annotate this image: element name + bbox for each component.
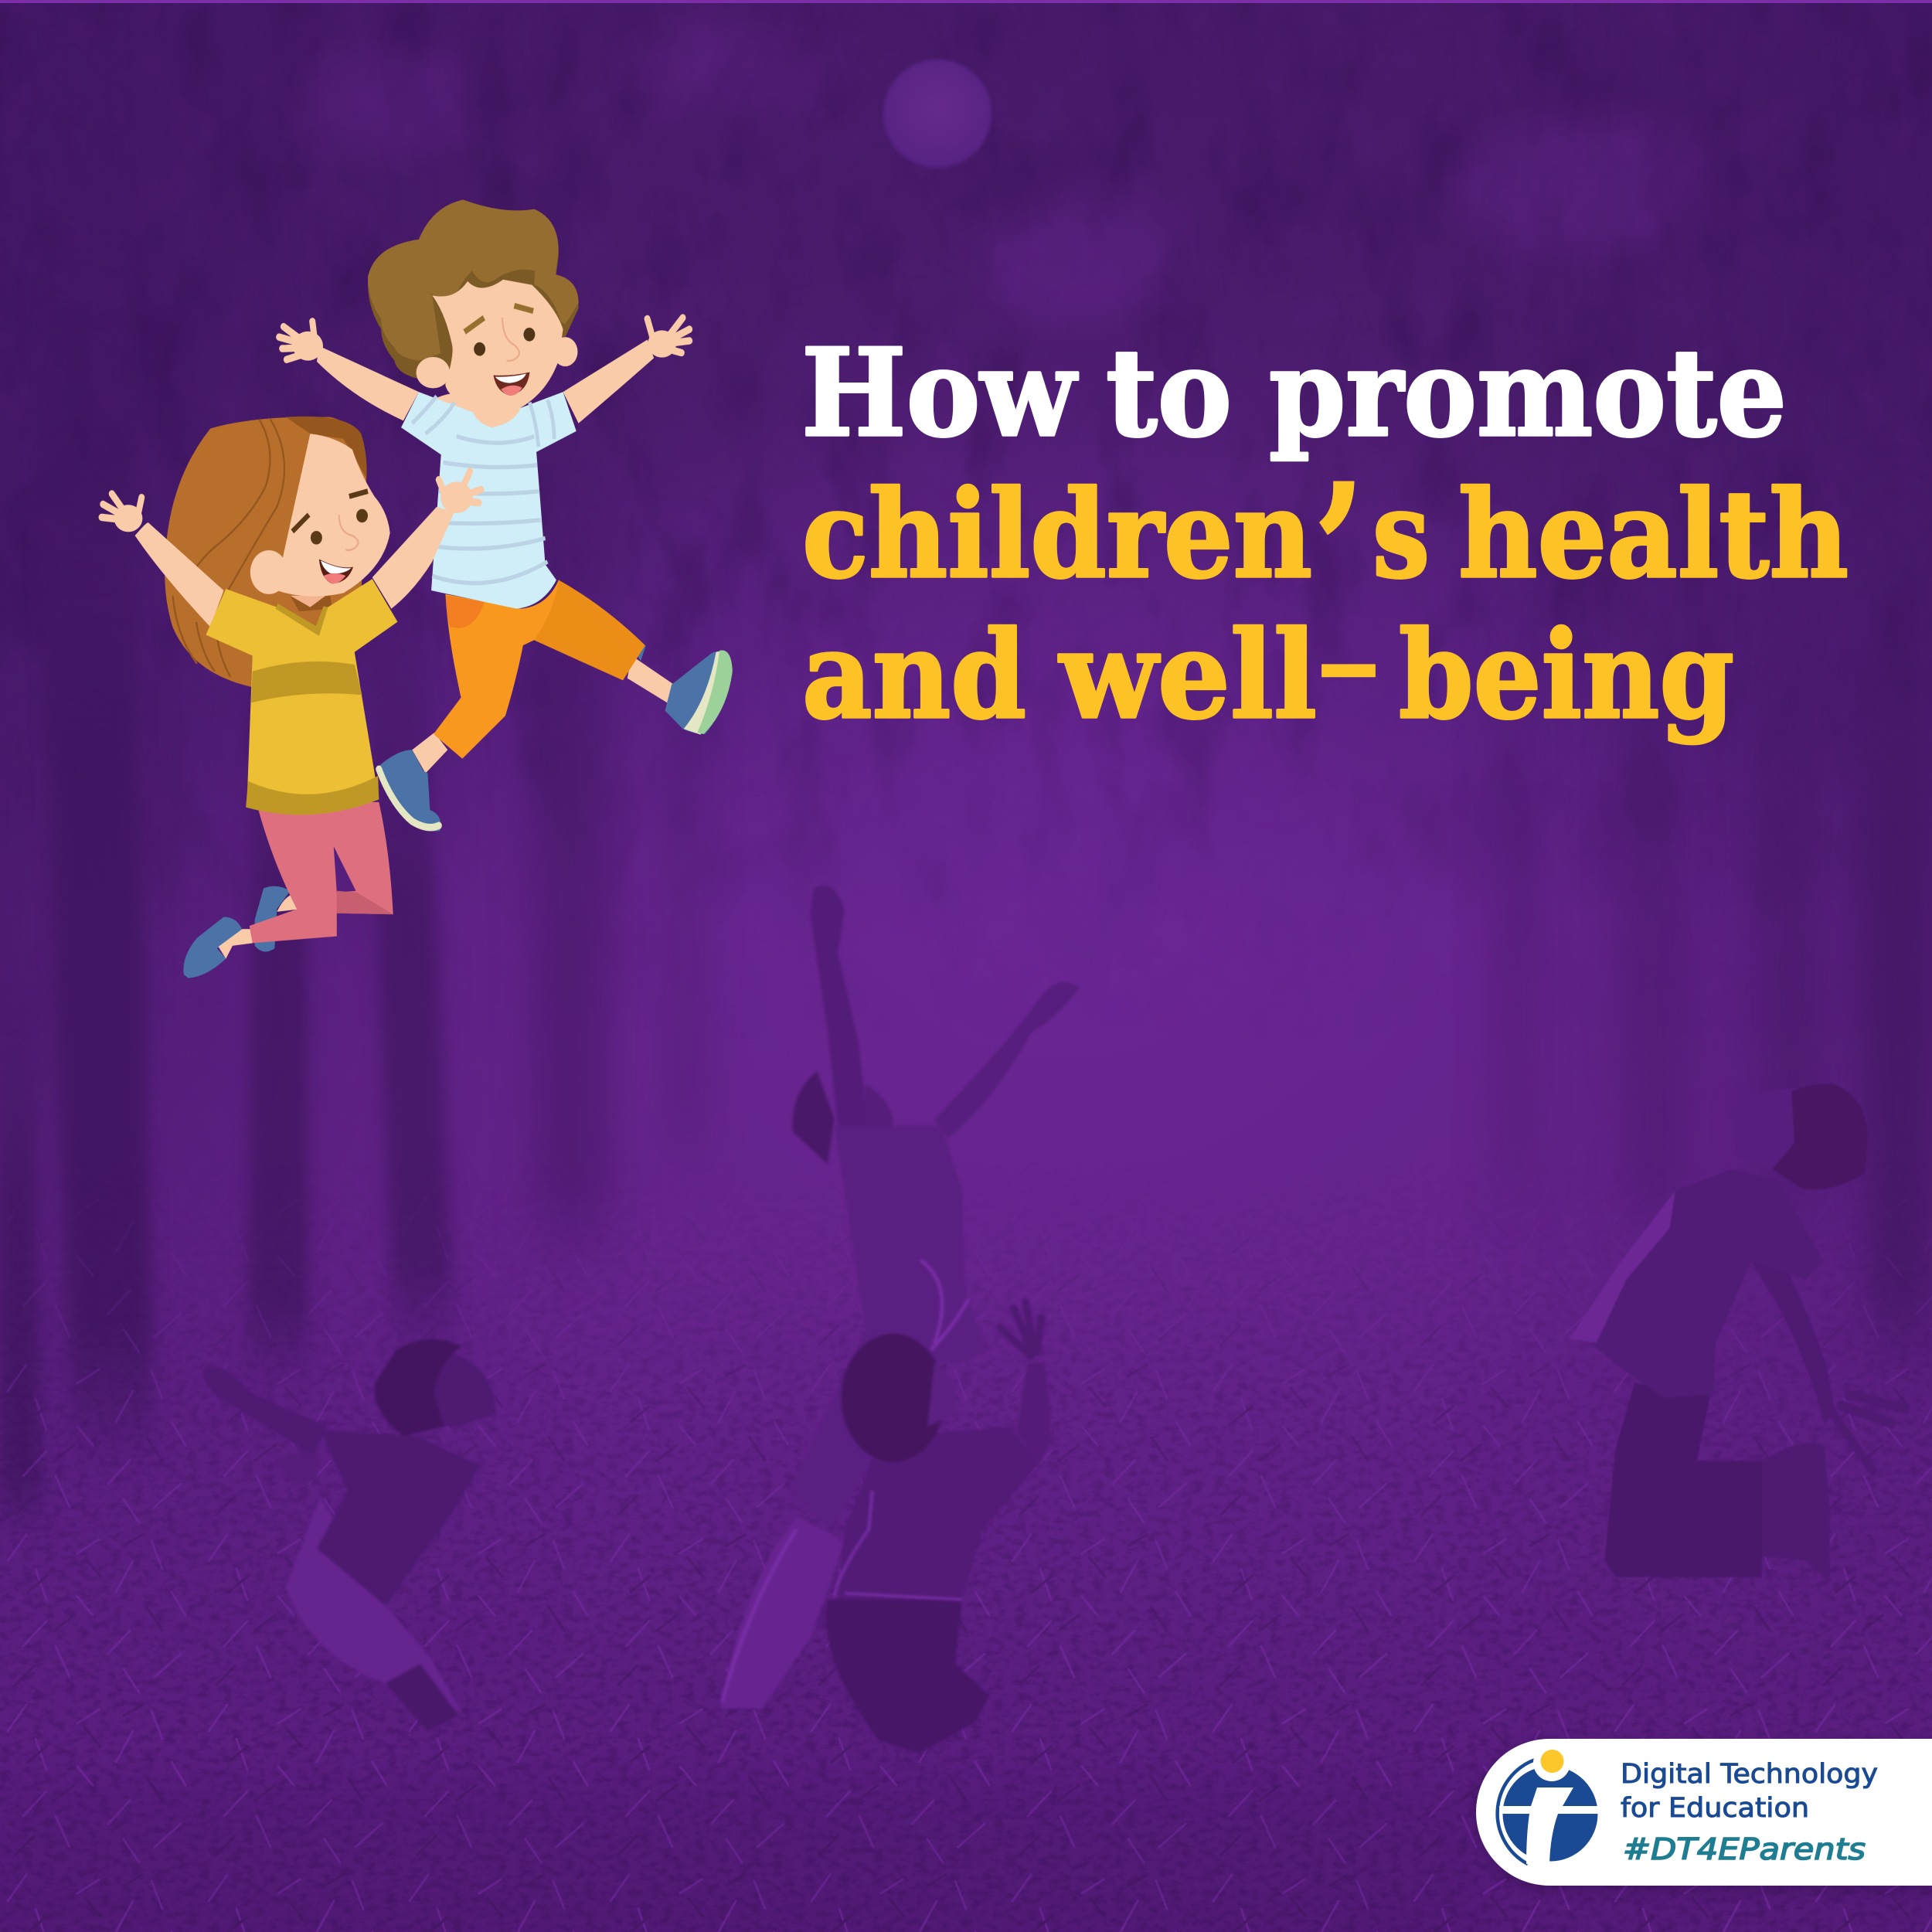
- title line 3: and: [802, 604, 1026, 746]
- girl face: [250, 434, 390, 611]
- photo: child on the left: [203, 1339, 496, 1731]
- illustration: two jumping cartoon children: [102, 199, 733, 978]
- cartoon girl: [102, 417, 481, 978]
- logo line 1: Digital Technology: [1621, 1759, 1878, 1790]
- title line 1: How: [801, 322, 1078, 464]
- photo: kneeling child on the right: [1570, 1084, 1906, 1583]
- hashtag: #DT4EParents: [1623, 1832, 1866, 1866]
- boy shorts: [434, 580, 646, 759]
- boy legs: [412, 656, 674, 774]
- title line 3: [802, 604, 1734, 746]
- logo line 2: for Education: [1621, 1793, 1809, 1824]
- title line 2: children: [802, 464, 1312, 605]
- title line 3: -: [1313, 609, 1384, 718]
- girl legs and shoes: [183, 886, 299, 978]
- title line 2: s: [1372, 464, 1430, 605]
- cartoon boy: [279, 199, 733, 831]
- title line 2: health: [1458, 464, 1849, 605]
- title line 1: [801, 322, 1787, 464]
- girl arms: [102, 471, 481, 627]
- title line 1: promote: [1269, 322, 1787, 464]
- photo: front child in the middle: [826, 1301, 1052, 1753]
- title line 1: to: [1106, 322, 1232, 464]
- title: [801, 322, 1849, 746]
- boy face: [417, 280, 577, 427]
- title line 2: [802, 443, 1849, 661]
- boy t-shirt: [401, 392, 577, 609]
- top edge stripe: [0, 0, 1932, 3]
- girl t-shirt: [206, 579, 397, 815]
- logo text: [1621, 1759, 1878, 1866]
- title line 3: being: [1399, 604, 1734, 746]
- boy shoes: [376, 650, 733, 831]
- logo icon: [1498, 1744, 1601, 1864]
- title line 3: well: [1058, 604, 1317, 746]
- photo: jumping child in the middle: [720, 885, 1080, 1709]
- photo: ball in the air: [883, 60, 992, 168]
- girl trousers: [250, 802, 393, 943]
- logo badge: [1476, 1739, 1932, 1890]
- girl hair: [165, 417, 367, 687]
- badge background: [1476, 1739, 1932, 1886]
- boy arms: [279, 318, 689, 434]
- boy hair: [368, 199, 579, 386]
- title line 2: ’: [1312, 443, 1366, 661]
